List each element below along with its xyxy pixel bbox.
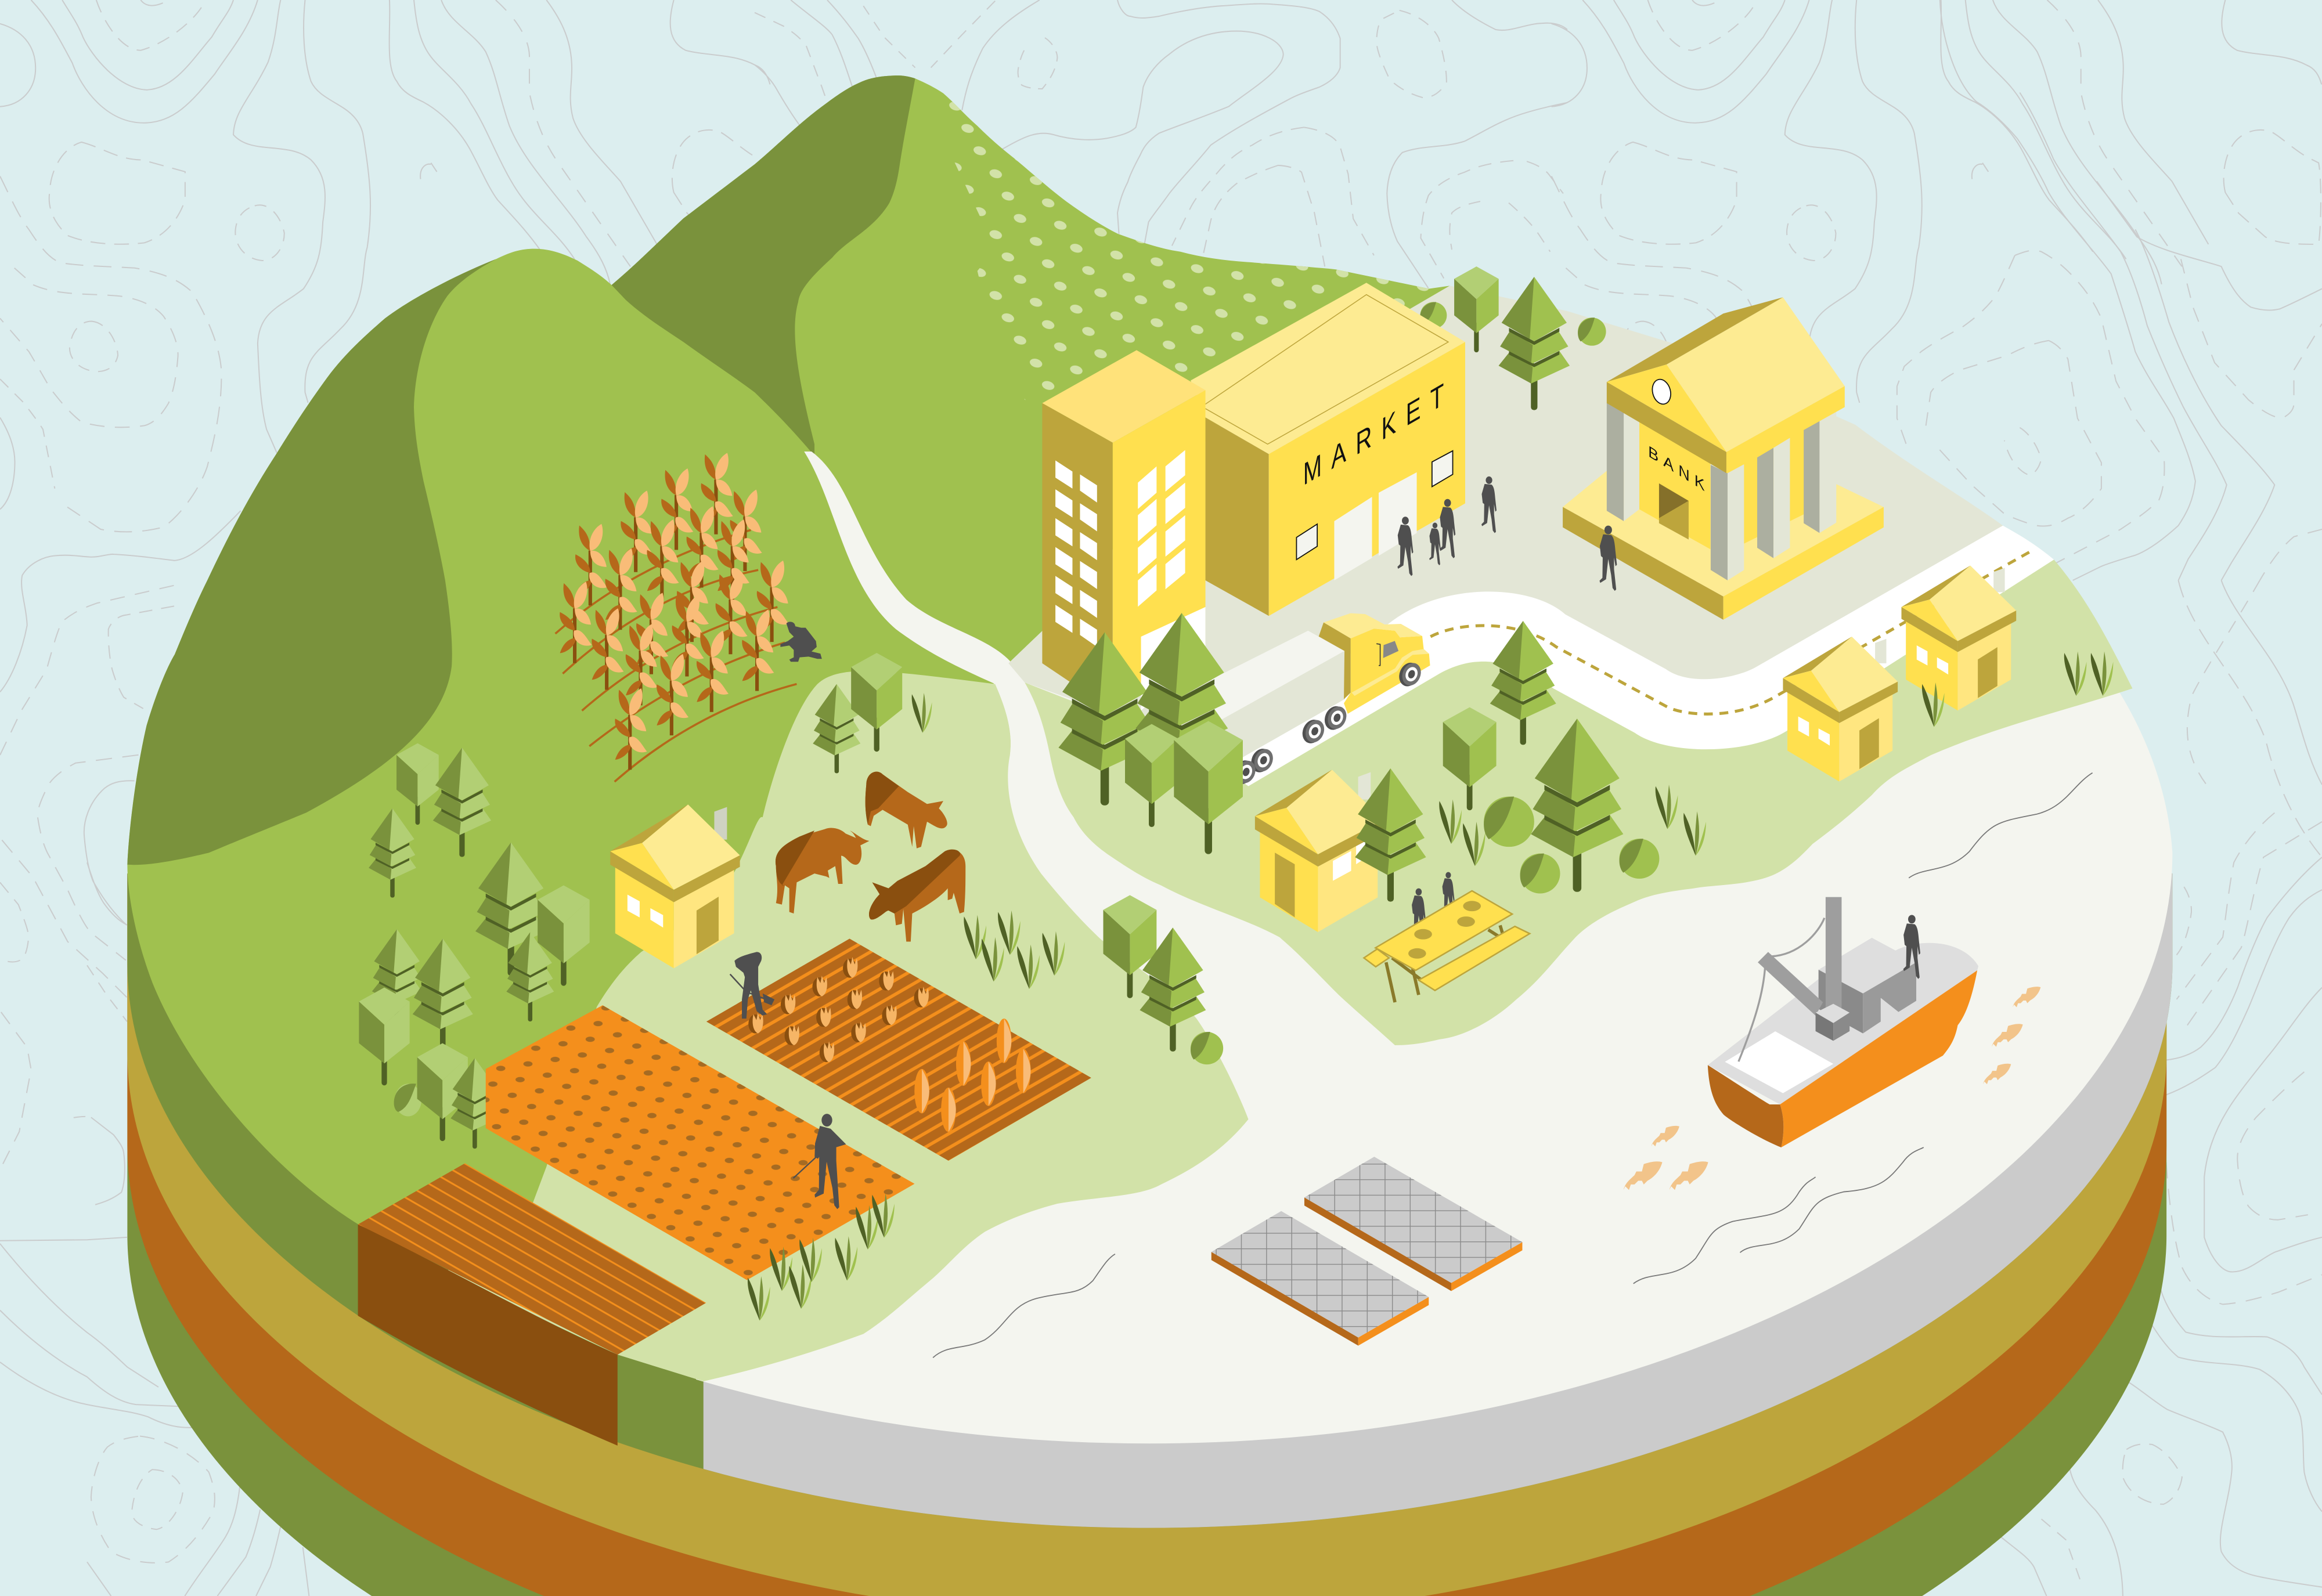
meadow grass [1439, 785, 1706, 866]
road centre dashes [1430, 551, 2032, 714]
river upper course [804, 452, 1050, 755]
river ripple lines [933, 773, 2093, 1357]
beach top surface [696, 680, 2172, 1444]
field grass [748, 1193, 895, 1321]
large pine on meadow [1531, 718, 1623, 892]
cow: middle [776, 828, 869, 913]
fish school [1624, 987, 2040, 1190]
market sign: MARKET [1303, 371, 1454, 493]
truck wheels [1230, 660, 1424, 787]
market doors [1334, 472, 1417, 580]
pale green farmland [444, 671, 1249, 1381]
disk rim: gray shore side [704, 873, 2172, 1528]
disk layer: orange soil [127, 873, 2166, 1596]
pine near truck [1135, 613, 1228, 786]
disk layer: gold soil [127, 873, 2166, 1596]
striped crop field [706, 938, 1091, 1161]
truck [1199, 613, 1430, 787]
crouching farmer [780, 622, 822, 662]
box tree on meadow [1443, 707, 1497, 810]
bank base [1563, 471, 1884, 597]
dotted orange field [486, 1005, 915, 1280]
farmer with hoe [794, 1114, 846, 1209]
pale green village meadow [1025, 559, 2132, 1045]
pale pine at river [813, 684, 860, 773]
river bank grass [964, 911, 1065, 989]
market building [1191, 283, 1465, 616]
bank building [1563, 297, 1884, 620]
market windows [1296, 451, 1453, 559]
boat cabin [1819, 938, 1916, 994]
tower windows [1055, 450, 1206, 710]
disk layer: green soil [127, 873, 2166, 1596]
aquaculture net: back [1304, 1157, 1522, 1291]
table plates [1408, 901, 1481, 959]
bank door [1659, 483, 1689, 518]
box tree behind market [1454, 266, 1499, 352]
house: village with picnic [1255, 770, 1383, 932]
boat hull [1780, 970, 1977, 1147]
far right grass [1922, 651, 2113, 727]
house: right small [1902, 565, 2016, 710]
bending farmer with shovel [730, 952, 774, 1019]
bank walls [1639, 414, 1710, 549]
bank roof [1667, 297, 1845, 452]
aquaculture net: front [1212, 1211, 1429, 1346]
fisherman [1903, 915, 1920, 979]
fishing boat [1708, 897, 1978, 1147]
box tree near truck [1125, 724, 1178, 827]
people at picnic [1412, 872, 1455, 941]
bush behind market [1578, 317, 1606, 346]
big box tree near truck [1174, 721, 1243, 854]
hills: main green land [127, 75, 1450, 1225]
plaza paved ground [1008, 286, 2003, 755]
dark ridge: back mountain [612, 75, 915, 456]
picnic table [1364, 891, 1530, 1002]
left forest [359, 743, 590, 1149]
dark ridge: front mountain [127, 259, 496, 865]
tall crops [914, 1019, 1031, 1132]
disk rim: olive land side [127, 873, 2172, 1528]
cow: front [869, 850, 965, 941]
boat deck [1708, 938, 1978, 1104]
bush by river [1191, 1032, 1223, 1064]
meadow bushes [1484, 796, 1659, 894]
pine near road [1058, 632, 1151, 806]
bank sign: BANK [1648, 442, 1710, 498]
cow: back [866, 772, 947, 848]
house: lower small [1783, 637, 1898, 782]
terrace field cross section [358, 1225, 618, 1446]
people near market [1397, 476, 1497, 576]
pine on meadow [1490, 621, 1556, 745]
tower building [1042, 350, 1206, 710]
bank columns [1607, 403, 1819, 580]
pine beside village house [1355, 768, 1426, 902]
hillside grass [912, 693, 932, 733]
box tree by river [1104, 895, 1156, 998]
field seedlings [748, 957, 929, 1062]
bush at market back [1420, 302, 1447, 328]
hillside crop rows [556, 453, 796, 782]
person at bank [1599, 526, 1617, 591]
pine tree behind market [1499, 277, 1570, 410]
dotted hillside pattern [949, 102, 1429, 400]
farmhouse [610, 804, 740, 968]
road [1214, 526, 2054, 786]
pine by river [1140, 927, 1206, 1052]
terrace field top [358, 1163, 706, 1355]
box tree at river [851, 653, 902, 752]
